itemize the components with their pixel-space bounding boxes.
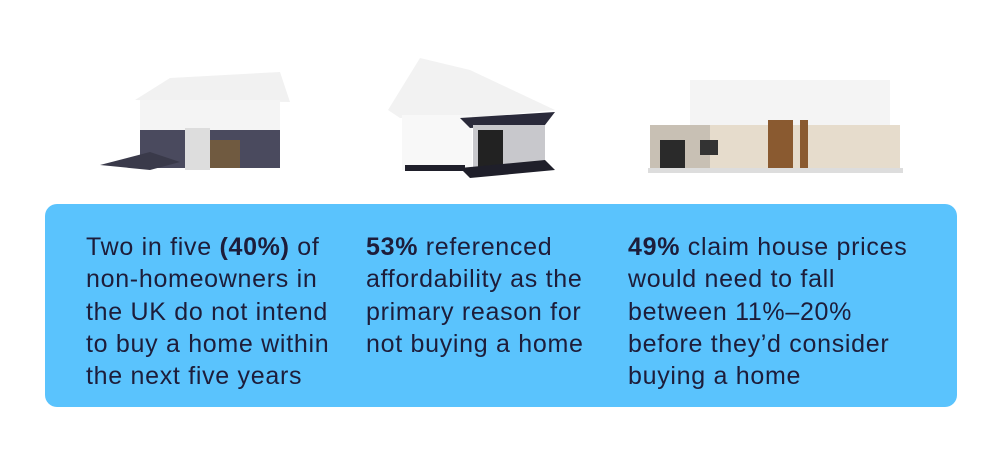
text: stat 1 bbox=[86, 233, 329, 390]
text: stat 3: buying a home bbox=[628, 362, 801, 390]
text: stat 1: Two in five (40%) of bbox=[86, 233, 320, 261]
text: stat 3: between 11%–20% bbox=[628, 298, 852, 326]
icon: house 3 bbox=[648, 80, 903, 173]
text: stat 1: non-homeowners in bbox=[86, 265, 317, 293]
text: stat 3: before they’d consider bbox=[628, 330, 889, 358]
panel: stats box bbox=[45, 204, 957, 407]
text: stat 3 bbox=[628, 233, 907, 390]
text: stat 2: not buying a home bbox=[366, 330, 584, 358]
text: stat 1: to buy a home within bbox=[86, 330, 329, 358]
text: stat 2: affordability as the bbox=[366, 265, 582, 293]
text: stat 3: 49% claim house prices bbox=[628, 233, 907, 261]
text: stat 2 bbox=[366, 233, 584, 358]
icon: house 1 bbox=[100, 72, 290, 170]
text: stat 2: primary reason for bbox=[366, 298, 581, 326]
houses illustrations bbox=[100, 58, 903, 178]
text: stat 3: would need to fall bbox=[628, 265, 835, 293]
text: stat 1: the UK do not intend bbox=[86, 298, 328, 326]
text: stat 1: the next five years bbox=[86, 362, 302, 390]
icon: house 2 bbox=[388, 58, 555, 178]
text: stat 2: 53% referenced bbox=[366, 233, 552, 261]
